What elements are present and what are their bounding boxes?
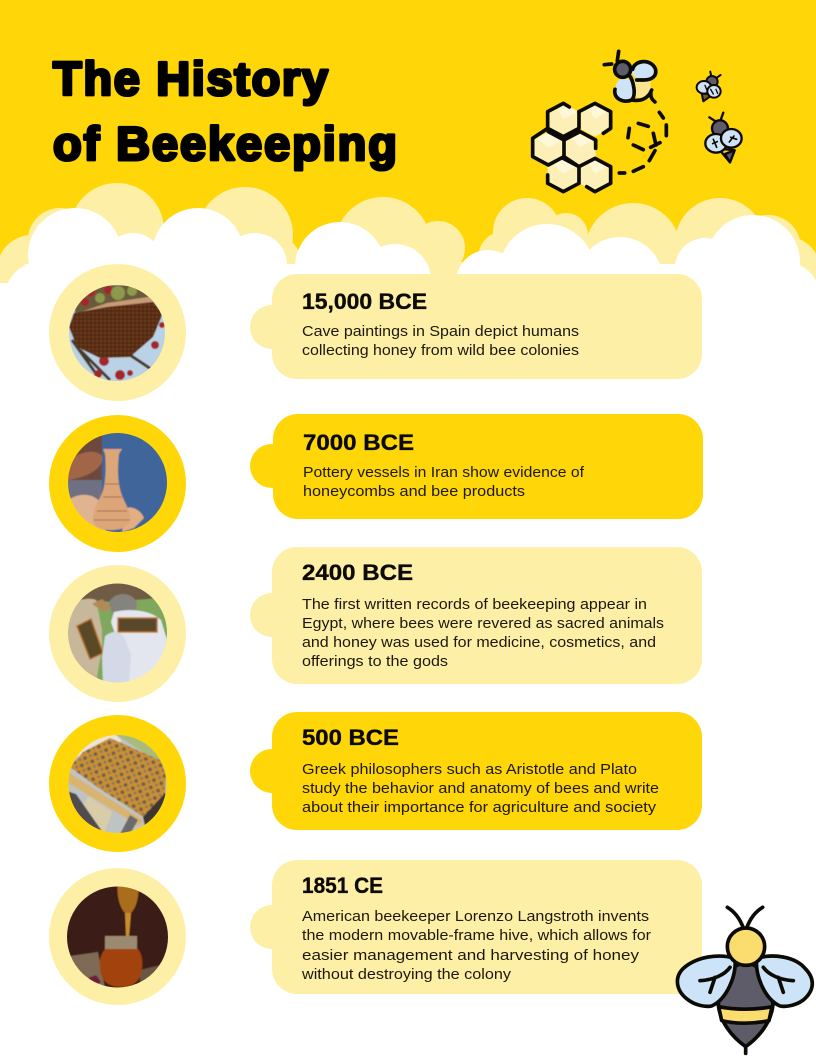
medallion: 15,000 BCE	[49, 264, 186, 401]
timeline card 1: 15,000 BCE	[302, 289, 427, 314]
photo: clay pottery vase	[68, 433, 167, 532]
photo: honey dripping into a jar	[67, 886, 168, 988]
medallion: 1851 CE	[49, 868, 186, 1005]
timeline card 5: American beekeeper Lorenzo Langstroth invents	[302, 908, 649, 925]
photo: beekeepers in white suits	[68, 584, 167, 682]
timeline item 3	[49, 565, 186, 702]
timeline card 4: Greek philosophers such as Aristotle and Plato	[302, 761, 637, 778]
timeline card 2	[250, 414, 703, 519]
timeline card 3: and honey was used for medicine, cosmetics, and	[302, 634, 656, 651]
timeline card 1	[250, 274, 702, 379]
timeline card 4: 500 BCE	[302, 725, 399, 750]
icon: honeycomb with bee and dashed flight path	[533, 51, 742, 192]
photo: wild honeycomb on a branch	[69, 285, 165, 381]
medallion: 2400 BCE	[49, 565, 186, 702]
medallion: 7000 BCE	[49, 415, 186, 552]
timeline card 5	[250, 860, 702, 994]
timeline card 3: offerings to the gods	[302, 653, 448, 670]
small bee	[697, 72, 721, 101]
photo: honeycomb frame with bees	[68, 735, 166, 833]
icon: large bee	[677, 907, 812, 1053]
cream cloud layer	[0, 183, 816, 308]
timeline card 3: The first written records of beekeeping appear in	[302, 596, 647, 613]
timeline card 2: honeycombs and bee products	[303, 483, 525, 500]
flying bee	[604, 51, 656, 102]
dashed flight path	[619, 112, 666, 173]
timeline card 3	[250, 547, 702, 684]
header background	[0, 0, 816, 290]
timeline card 5: easier management and harvesting of honey	[302, 947, 640, 964]
timeline card 3: Egypt, where bees were revered as sacred animals	[302, 615, 664, 632]
timeline item 5	[49, 868, 186, 1005]
timeline card 4: study the behavior and anatomy of bees and write	[302, 780, 659, 797]
timeline card 3: 2400 BCE	[302, 560, 413, 585]
timeline item 2	[49, 415, 186, 552]
timeline card 2: 7000 BCE	[303, 430, 414, 455]
timeline card 5: without destroying the colony	[301, 966, 512, 983]
large small bee	[705, 113, 742, 162]
honeycomb	[533, 103, 611, 192]
timeline item 4	[49, 715, 186, 852]
timeline card 5: the modern movable-frame hive, which allows for	[302, 927, 651, 944]
timeline card 5: 1851 CE	[302, 873, 383, 898]
timeline card 4	[250, 712, 702, 830]
medallion: 500 BCE	[49, 715, 186, 852]
timeline card 2: Pottery vessels in Iran show evidence of	[303, 464, 585, 481]
timeline item 1	[49, 264, 186, 401]
title: of Beekeeping	[53, 117, 397, 170]
title: The History	[53, 52, 328, 105]
timeline card 1: collecting honey from wild bee colonies	[302, 342, 579, 359]
timeline card 4: about their importance for agriculture and society	[302, 799, 657, 816]
timeline card 1: Cave paintings in Spain depict humans	[302, 323, 579, 340]
title	[53, 52, 397, 170]
